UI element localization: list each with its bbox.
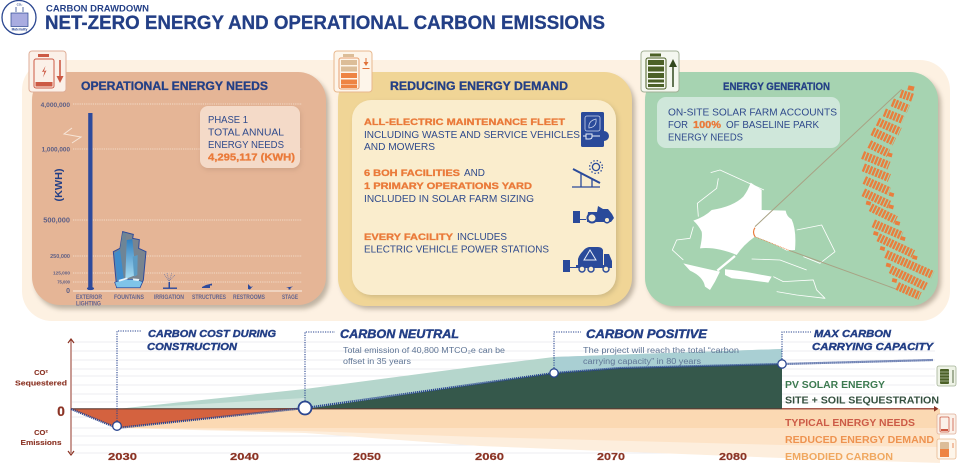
section label: CARBON DRAWDOWN xyxy=(46,4,149,14)
area: site + soil sequestration xyxy=(305,364,782,409)
icon: solar panel xyxy=(572,161,602,187)
bar chart: energy by use: 75,000 xyxy=(57,280,71,284)
axis title: (KWH) xyxy=(54,168,65,202)
area: typical energy needs xyxy=(117,409,940,428)
icon: materiality logo xyxy=(2,0,36,34)
legend: TYPICAL ENERGY NEEDS xyxy=(785,417,915,429)
legend: EMBODIED CARBON xyxy=(785,451,893,463)
annotation: max carbon capacity: MAX CARBON xyxy=(814,329,892,340)
callout: phase 1 total: TOTAL ANNUAL xyxy=(208,128,284,138)
bar chart: energy by use: IRRIGATION xyxy=(154,295,184,301)
icon: structures xyxy=(202,284,212,288)
area: reduced energy demand xyxy=(117,409,940,447)
bar chart: energy by use: 125,000 xyxy=(53,270,70,276)
bar chart: energy by use: LIGHTING xyxy=(76,302,101,308)
callout: solar farm: 100% xyxy=(693,120,721,131)
bar chart: energy by use xyxy=(41,102,302,308)
callout: phase 1 total xyxy=(200,106,301,170)
text block: facilities: 1 PRIMARY OPERATIONS YARD xyxy=(364,181,532,192)
text block: facilities: AND xyxy=(464,168,485,179)
trend line xyxy=(71,360,933,428)
area: pv solar xyxy=(117,349,782,409)
map: park site plan with solar farm xyxy=(672,85,933,298)
leader lines xyxy=(117,331,811,426)
text block: every facility: INCLUDES xyxy=(457,232,507,243)
text block: electric fleet: ALL-ELECTRIC MAINTENANCE FLEET xyxy=(364,117,565,128)
icon: legend battery full xyxy=(937,366,956,386)
bar chart: energy by use: 1,000,000 xyxy=(42,146,70,154)
text block: every facility: EVERY FACILITY xyxy=(364,232,454,243)
icon: restrooms xyxy=(248,284,253,290)
chart: carbon timeline xyxy=(15,329,956,463)
y axis labels: CO² xyxy=(34,368,48,377)
heading: REDUCING ENERGY DEMAND xyxy=(390,79,568,93)
title: NET-ZERO ENERGY AND OPERATIONAL CARBON EMISSIONS xyxy=(45,12,605,34)
annotation: carbon positive: carrying capacity” in 80 years xyxy=(583,357,701,366)
callout: solar farm xyxy=(657,97,840,148)
bar chart: energy by use: 500,000 xyxy=(43,216,70,224)
inner card xyxy=(354,102,618,297)
chart: carbon timeline: CO² xyxy=(34,428,48,437)
panel: energy generation xyxy=(641,51,941,309)
legend: SITE + SOIL SEQUESTRATION xyxy=(785,394,939,406)
text block: facilities xyxy=(364,168,534,205)
callout: phase 1 total: 4,295,117 (KWH) xyxy=(208,152,295,164)
legend: REDUCED ENERGY DEMAND xyxy=(785,434,934,446)
chart: carbon timeline: 2080 xyxy=(719,451,747,463)
callout: solar farm: OF BASELINE PARK xyxy=(726,120,819,131)
callout: solar farm: ENERGY NEEDS xyxy=(668,132,743,144)
bar chart: energy by use: 0 xyxy=(66,288,70,295)
bar chart: energy by use: STRUCTURES xyxy=(192,295,226,301)
icon: legend battery medium xyxy=(937,439,956,459)
heading: OPERATIONAL ENERGY NEEDS xyxy=(81,79,268,93)
annotation: max carbon capacity: CARRYING CAPACITY xyxy=(812,342,935,353)
area: embodied carbon xyxy=(117,409,940,463)
heading: ENERGY GENERATION xyxy=(723,81,830,93)
text block: facilities: INCLUDED IN SOLAR FARM SIZING xyxy=(364,194,534,205)
icon: materiality logo: Materiality xyxy=(12,28,28,32)
legend: PV SOLAR ENERGY xyxy=(785,379,885,391)
chart: carbon timeline: 0 xyxy=(57,403,65,419)
axis break xyxy=(64,128,81,143)
legend xyxy=(785,379,939,463)
panel: reducing energy demand xyxy=(334,51,635,309)
icon: stage xyxy=(286,286,293,290)
text block: electric fleet: INCLUDING WASTE AND SERVICE VEHICLES xyxy=(364,130,580,141)
icon: electric waste truck xyxy=(563,247,612,272)
bar chart: energy by use: STAGE xyxy=(282,295,298,301)
text block: facilities: 6 BOH FACILITIES xyxy=(364,168,460,179)
chart: carbon timeline: Sequestered xyxy=(15,378,67,388)
x axis labels: EXTERIOR xyxy=(76,295,103,301)
annotation: carbon neutral: Total emission of 40,800 MTCO₂e can be xyxy=(343,346,506,355)
year labels: 2030 xyxy=(108,451,137,463)
annotation: carbon positive: The project will reach the total “carbon xyxy=(583,346,739,355)
backing panel xyxy=(22,60,950,321)
icon: electric mower xyxy=(573,206,614,223)
markers xyxy=(113,422,121,430)
bar chart: energy by use: FOUNTAINS xyxy=(114,295,144,301)
bar chart: energy by use: 4,000,000 xyxy=(41,102,70,109)
chart: carbon timeline: 2040 xyxy=(230,451,259,463)
callout: solar farm: ON-SITE SOLAR FARM ACCOUNTS xyxy=(668,108,837,118)
zero line xyxy=(71,408,782,410)
annotation: carbon cost: CONSTRUCTION xyxy=(147,342,238,353)
icon: materiality logo: CO₂ xyxy=(17,2,23,6)
area: carbon cost xyxy=(71,408,305,428)
callout: phase 1 total: PHASE 1 xyxy=(208,115,248,126)
icon: battery low with arrow xyxy=(29,51,66,92)
icon: legend battery low xyxy=(937,414,956,434)
icon: battery medium with arrow xyxy=(334,51,372,92)
icon: battery full with arrow xyxy=(641,51,679,92)
y axis arrow xyxy=(68,339,74,455)
text block: every facility xyxy=(364,232,549,256)
chart: carbon timeline: 2050 xyxy=(353,451,381,463)
header: logo and title xyxy=(2,0,605,34)
annotation: max carbon capacity xyxy=(812,329,935,353)
chart: carbon timeline: 2060 xyxy=(475,451,504,463)
annotation: carbon neutral: CARBON NEUTRAL xyxy=(340,329,459,341)
bar chart: energy by use: 250,000 xyxy=(50,254,70,260)
icon: ev charger xyxy=(581,112,609,147)
annotation: carbon neutral xyxy=(340,329,506,366)
icon: irrigation xyxy=(163,273,177,289)
panel: operational energy needs xyxy=(29,51,329,309)
callout: solar farm: FOR xyxy=(668,120,688,131)
text block: electric fleet: AND MOWERS xyxy=(364,142,435,153)
chart: carbon timeline: 2070 xyxy=(597,451,625,463)
annotation: carbon positive: CARBON POSITIVE xyxy=(586,329,707,341)
callout: phase 1 total: ENERGY NEEDS xyxy=(208,140,284,151)
text block: every facility: ELECTRIC VEHICLE POWER STATIONS xyxy=(364,244,549,256)
bar chart: energy by use: RESTROOMS xyxy=(233,295,265,301)
chart: carbon timeline: Emissions xyxy=(20,438,62,447)
annotation: carbon neutral: offset in 35 years xyxy=(343,357,411,366)
text block: electric fleet xyxy=(364,117,580,153)
bar: exterior lighting xyxy=(88,113,92,290)
icon: fountains xyxy=(113,232,146,288)
annotation: carbon cost: CARBON COST DURING xyxy=(148,329,276,340)
annotation: carbon cost xyxy=(147,329,276,353)
annotation: carbon positive xyxy=(583,329,739,366)
